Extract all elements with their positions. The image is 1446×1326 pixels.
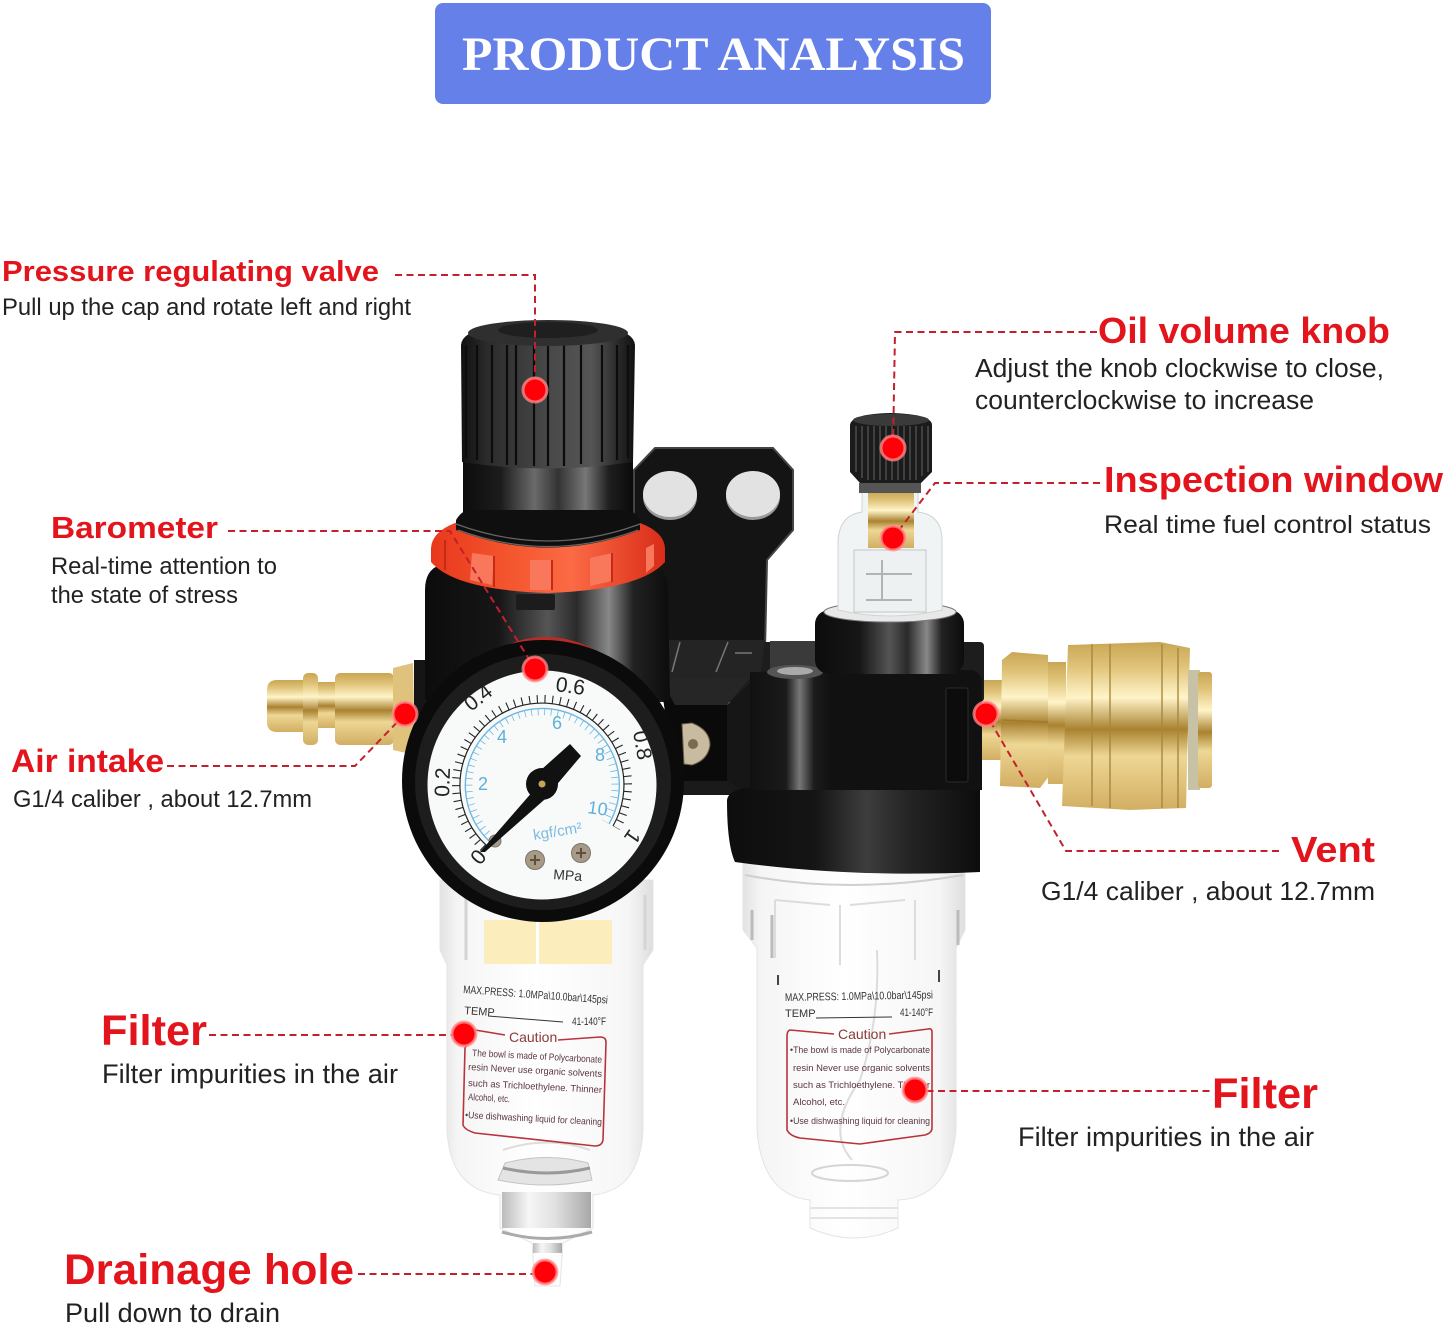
manifold block and right body	[640, 640, 984, 874]
callout: inspection window: Real time fuel control status	[1104, 511, 1431, 539]
right bowl label: MAX.PRESS: 1.0MPa\10.0bar\145psi	[785, 989, 933, 1004]
gauge face	[428, 670, 656, 900]
needle	[480, 744, 581, 852]
left filter bowl	[440, 880, 653, 1286]
scale numbers: 0	[466, 845, 491, 869]
scale numbers	[431, 673, 656, 884]
callout: pressure regulating valve: Pressure regulating valve	[2, 256, 379, 288]
right lubricator bowl	[743, 860, 965, 1238]
callout: right filter: Filter impurities in the air	[1018, 1122, 1314, 1152]
callout: air intake: Air intake	[11, 743, 164, 779]
callout: right filter	[1018, 1070, 1318, 1152]
callout: vent: Vent	[1291, 829, 1375, 870]
right bowl label: resin Never use organic solvents	[793, 1063, 930, 1074]
callout: drainage hole	[64, 1246, 354, 1326]
left bowl label: TEMP	[464, 1005, 495, 1019]
leader lines	[167, 275, 1279, 1274]
callout: air intake: G1/4 caliber , about 12.7mm	[13, 786, 312, 813]
callout: barometer: Barometer	[51, 510, 218, 545]
left bowl label: Caution	[509, 1029, 557, 1045]
right bowl label: 41-140°F	[900, 1007, 933, 1019]
scale numbers: 0.8	[628, 729, 656, 762]
scale numbers: 10	[586, 797, 609, 820]
left bowl label: The bowl is made of Polycarbonate	[472, 1048, 602, 1066]
callout: barometer	[51, 510, 277, 609]
right bowl label: Caution	[838, 1026, 886, 1042]
callout: drainage hole: Drainage hole	[64, 1246, 354, 1294]
title banner	[435, 3, 991, 104]
marker dots	[393, 378, 998, 1284]
right bowl label: TEMP	[785, 1008, 816, 1020]
callout: barometer: Real-time attention to	[51, 553, 277, 580]
inspection window unit	[815, 413, 964, 674]
right bowl label: •The bowl is made of Polycarbonate	[790, 1045, 930, 1056]
mounting screw	[682, 723, 710, 765]
scale ticks	[456, 699, 628, 848]
scale numbers: MPa	[553, 866, 583, 884]
scale numbers: 2	[478, 774, 488, 794]
left bowl label: resin Never use organic solvents	[468, 1062, 602, 1080]
right brass quick coupler	[980, 642, 1212, 810]
mounting bracket	[634, 448, 793, 650]
oil volume knob body	[850, 413, 932, 483]
callout: inspection window	[1104, 459, 1444, 539]
callout: barometer: the state of stress	[51, 582, 238, 609]
callout: oil volume knob: Adjust the knob clockwise to close,	[975, 355, 1384, 383]
left bowl label: Alcohol, etc.	[468, 1092, 510, 1105]
screws	[489, 835, 590, 870]
callout: left filter	[101, 1007, 398, 1089]
callout: vent	[1041, 829, 1375, 906]
scale numbers: 1	[619, 825, 645, 848]
title banner: PRODUCT ANALYSIS	[462, 28, 965, 81]
left bowl label: 41-140°F	[572, 1016, 606, 1028]
right bowl label: Alcohol, etc.	[793, 1097, 845, 1108]
pressure regulating cap	[456, 320, 640, 548]
right bowl label	[778, 970, 939, 1144]
scale numbers: 0.4	[460, 680, 497, 716]
callout: oil volume knob: counterclockwise to increase	[975, 387, 1314, 415]
left bowl label: MAX.PRESS: 1.0MPa\10.0bar\145psi	[463, 984, 608, 1007]
left bowl label: •Use dishwashing liquid for cleaning	[465, 1110, 602, 1128]
scale numbers: 0.6	[554, 673, 586, 700]
callout: inspection window: Inspection window	[1104, 459, 1444, 500]
scale numbers: 8	[595, 745, 605, 765]
callout: left filter: Filter	[101, 1007, 207, 1055]
callout: pressure regulating valve	[2, 256, 411, 321]
callout: pressure regulating valve: Pull up the cap and rotate left and right	[2, 294, 411, 321]
callout: oil volume knob: Oil volume knob	[1098, 310, 1390, 351]
scale numbers: 6	[552, 713, 562, 733]
right bowl label: •Use dishwashing liquid for cleaning	[790, 1116, 930, 1127]
right bowl label: such as Trichloethylene. Thinner	[793, 1080, 930, 1091]
left brass nipple	[267, 660, 446, 755]
callout: left filter: Filter impurities in the air	[102, 1059, 398, 1089]
scale numbers: 4	[497, 727, 507, 747]
red reflection	[470, 637, 612, 680]
left regulator body	[425, 514, 670, 700]
callout: right filter: Filter	[1212, 1070, 1318, 1118]
left bowl label: such as Trichloethylene. Thinner	[468, 1078, 602, 1096]
callout: air intake	[11, 743, 312, 813]
callout: oil volume knob	[975, 310, 1390, 415]
callout: vent: G1/4 caliber , about 12.7mm	[1041, 876, 1375, 906]
left bowl label	[463, 984, 608, 1146]
barometer gauge	[402, 637, 684, 922]
scale numbers: kgf/cm²	[532, 819, 583, 844]
scale numbers: 0.2	[431, 767, 455, 797]
